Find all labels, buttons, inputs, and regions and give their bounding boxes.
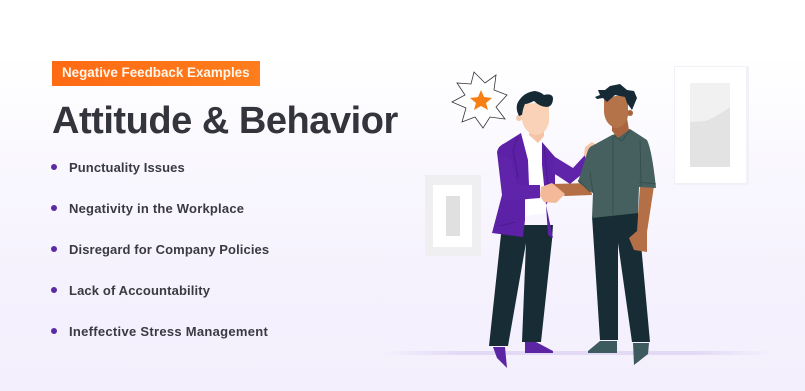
bullet: stress: Ineffective Stress Management — [69, 324, 268, 339]
left man trousers — [489, 225, 553, 346]
floor shadow — [383, 351, 771, 355]
purple sleeve — [499, 155, 587, 201]
purple jacket — [492, 133, 555, 238]
handshake hands — [540, 183, 565, 203]
purple lapel lines — [500, 137, 548, 226]
bullet: policies: Disregard for Company Policies — [69, 242, 269, 257]
left man face — [522, 102, 549, 135]
left man neck — [529, 122, 544, 143]
left man shoes — [493, 342, 553, 368]
bullet list — [51, 160, 269, 339]
shirt detail lines — [578, 130, 656, 216]
right man arm and hand — [629, 186, 654, 252]
left man hair — [517, 91, 553, 116]
icon: star badge — [452, 72, 507, 128]
right man shoes — [588, 341, 649, 365]
right man handshake arm — [550, 183, 592, 196]
man in purple jacket — [489, 91, 595, 368]
man in green shirt — [550, 84, 656, 365]
small picture frame — [425, 175, 481, 256]
left man ear — [516, 115, 522, 121]
right man ear — [627, 110, 633, 116]
left man hand on shoulder — [584, 142, 595, 158]
large picture frame — [674, 66, 749, 185]
bullet: punctuality: Punctuality Issues — [69, 160, 185, 175]
tag: Negative Feedback Examples: Negative Feedback Examples — [62, 65, 250, 80]
bullet: accountability: Lack of Accountability — [69, 283, 210, 298]
title: Attitude & Behavior — [52, 100, 398, 142]
right man face — [604, 94, 628, 128]
green shirt — [578, 129, 656, 218]
right man hair — [595, 84, 637, 110]
bullet: negativity: Negativity in the Workplace — [69, 201, 244, 216]
left man shirt — [521, 133, 550, 216]
right man neck — [612, 118, 629, 138]
right man trousers — [592, 211, 650, 342]
tag: Negative Feedback Examples — [52, 61, 260, 86]
